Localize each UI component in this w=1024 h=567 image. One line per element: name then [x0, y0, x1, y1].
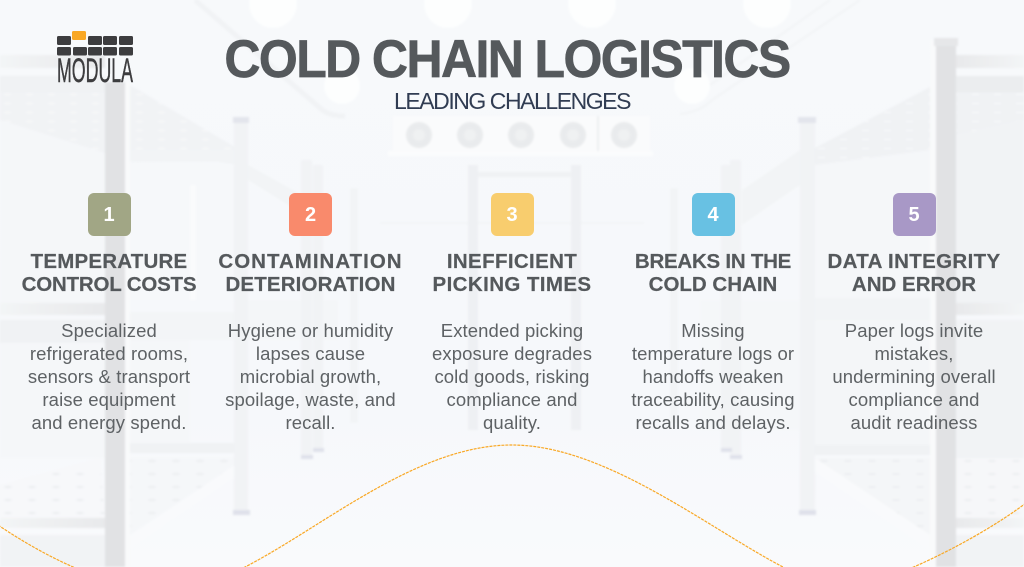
column 1: temperature control costs [22, 193, 196, 433]
text 2 [225, 320, 396, 433]
text 4: traceability, causing [631, 389, 795, 410]
heading 1: TEMPERATURE [31, 250, 187, 273]
text 3: Extended picking [441, 320, 583, 341]
text 2: recall. [285, 412, 336, 433]
heading 5 [827, 250, 1001, 296]
text 1: Specialized [61, 320, 157, 341]
text 4: Missing [681, 320, 745, 341]
heading 2: DETERIORATION [225, 273, 396, 296]
text 4: recalls and delays. [635, 412, 791, 433]
text 2: microbial growth, [240, 366, 381, 387]
text 3: quality. [483, 412, 541, 433]
heading 1 [22, 250, 196, 296]
logo: Modula [57, 31, 134, 83]
badge 5 [892, 193, 936, 236]
badge 5: 5 [908, 204, 920, 226]
text 5: undermining overall [832, 366, 996, 387]
column 3: inefficient picking times [432, 193, 592, 433]
text 1: sensors & transport [28, 366, 190, 387]
badge 2: 2 [305, 204, 316, 226]
column 5: data integrity and error [827, 193, 1001, 433]
column 4: breaks in the cold chain [631, 193, 795, 433]
text 3: cold goods, risking [434, 366, 590, 387]
badge 3: 3 [506, 204, 518, 226]
text 4 [631, 320, 795, 433]
text 2: spoilage, waste, and [225, 389, 396, 410]
column 2: contamination deterioration [218, 193, 403, 433]
text 2: Hygiene or humidity [228, 320, 393, 341]
text 5 [832, 320, 996, 433]
heading 4: BREAKS IN THE [635, 250, 791, 273]
right shelving [956, 55, 1024, 68]
text 4: handoffs weaken [642, 366, 784, 387]
title: COLD CHAIN LOGISTICS [224, 30, 790, 88]
heading 3 [433, 250, 591, 296]
heading 5: DATA INTEGRITY [827, 250, 1001, 273]
text 4: temperature logs or [632, 343, 794, 364]
text 5: Paper logs invite [845, 320, 983, 341]
badge 1: 1 [103, 204, 115, 226]
dashed orange wave [0, 445, 1024, 567]
heading 3: INEFFICIENT [447, 250, 577, 273]
text 5: mistakes, [874, 343, 954, 364]
text 5: audit readiness [850, 412, 977, 433]
text 1 [28, 320, 190, 433]
text 2: lapses cause [256, 343, 365, 364]
text 3 [432, 320, 592, 433]
text 3: compliance and [446, 389, 577, 410]
subtitle: LEADING CHALLENGES [394, 88, 630, 114]
text 1: raise equipment [42, 389, 176, 410]
heading 1: CONTROL COSTS [22, 273, 196, 296]
heading 4: COLD CHAIN [649, 273, 777, 296]
badge 3 [490, 193, 534, 236]
ceiling [195, 0, 345, 116]
heading 4 [635, 250, 791, 296]
heading 3: PICKING TIMES [433, 273, 591, 296]
text 1: refrigerated rooms, [30, 343, 188, 364]
badge 1 [88, 193, 130, 236]
text 3: exposure degrades [432, 343, 592, 364]
badge 2 [289, 193, 332, 236]
text 1: and energy spend. [32, 412, 186, 433]
badge 4: 4 [707, 204, 719, 226]
heading 2 [218, 250, 403, 296]
text 5: compliance and [848, 389, 979, 410]
left shelving [0, 55, 105, 68]
badge 4 [692, 193, 734, 236]
heading 2: CONTAMINATION [218, 250, 403, 273]
fan unit [393, 116, 650, 151]
back wall frame [380, 222, 644, 224]
heading 5: AND ERROR [852, 273, 976, 296]
